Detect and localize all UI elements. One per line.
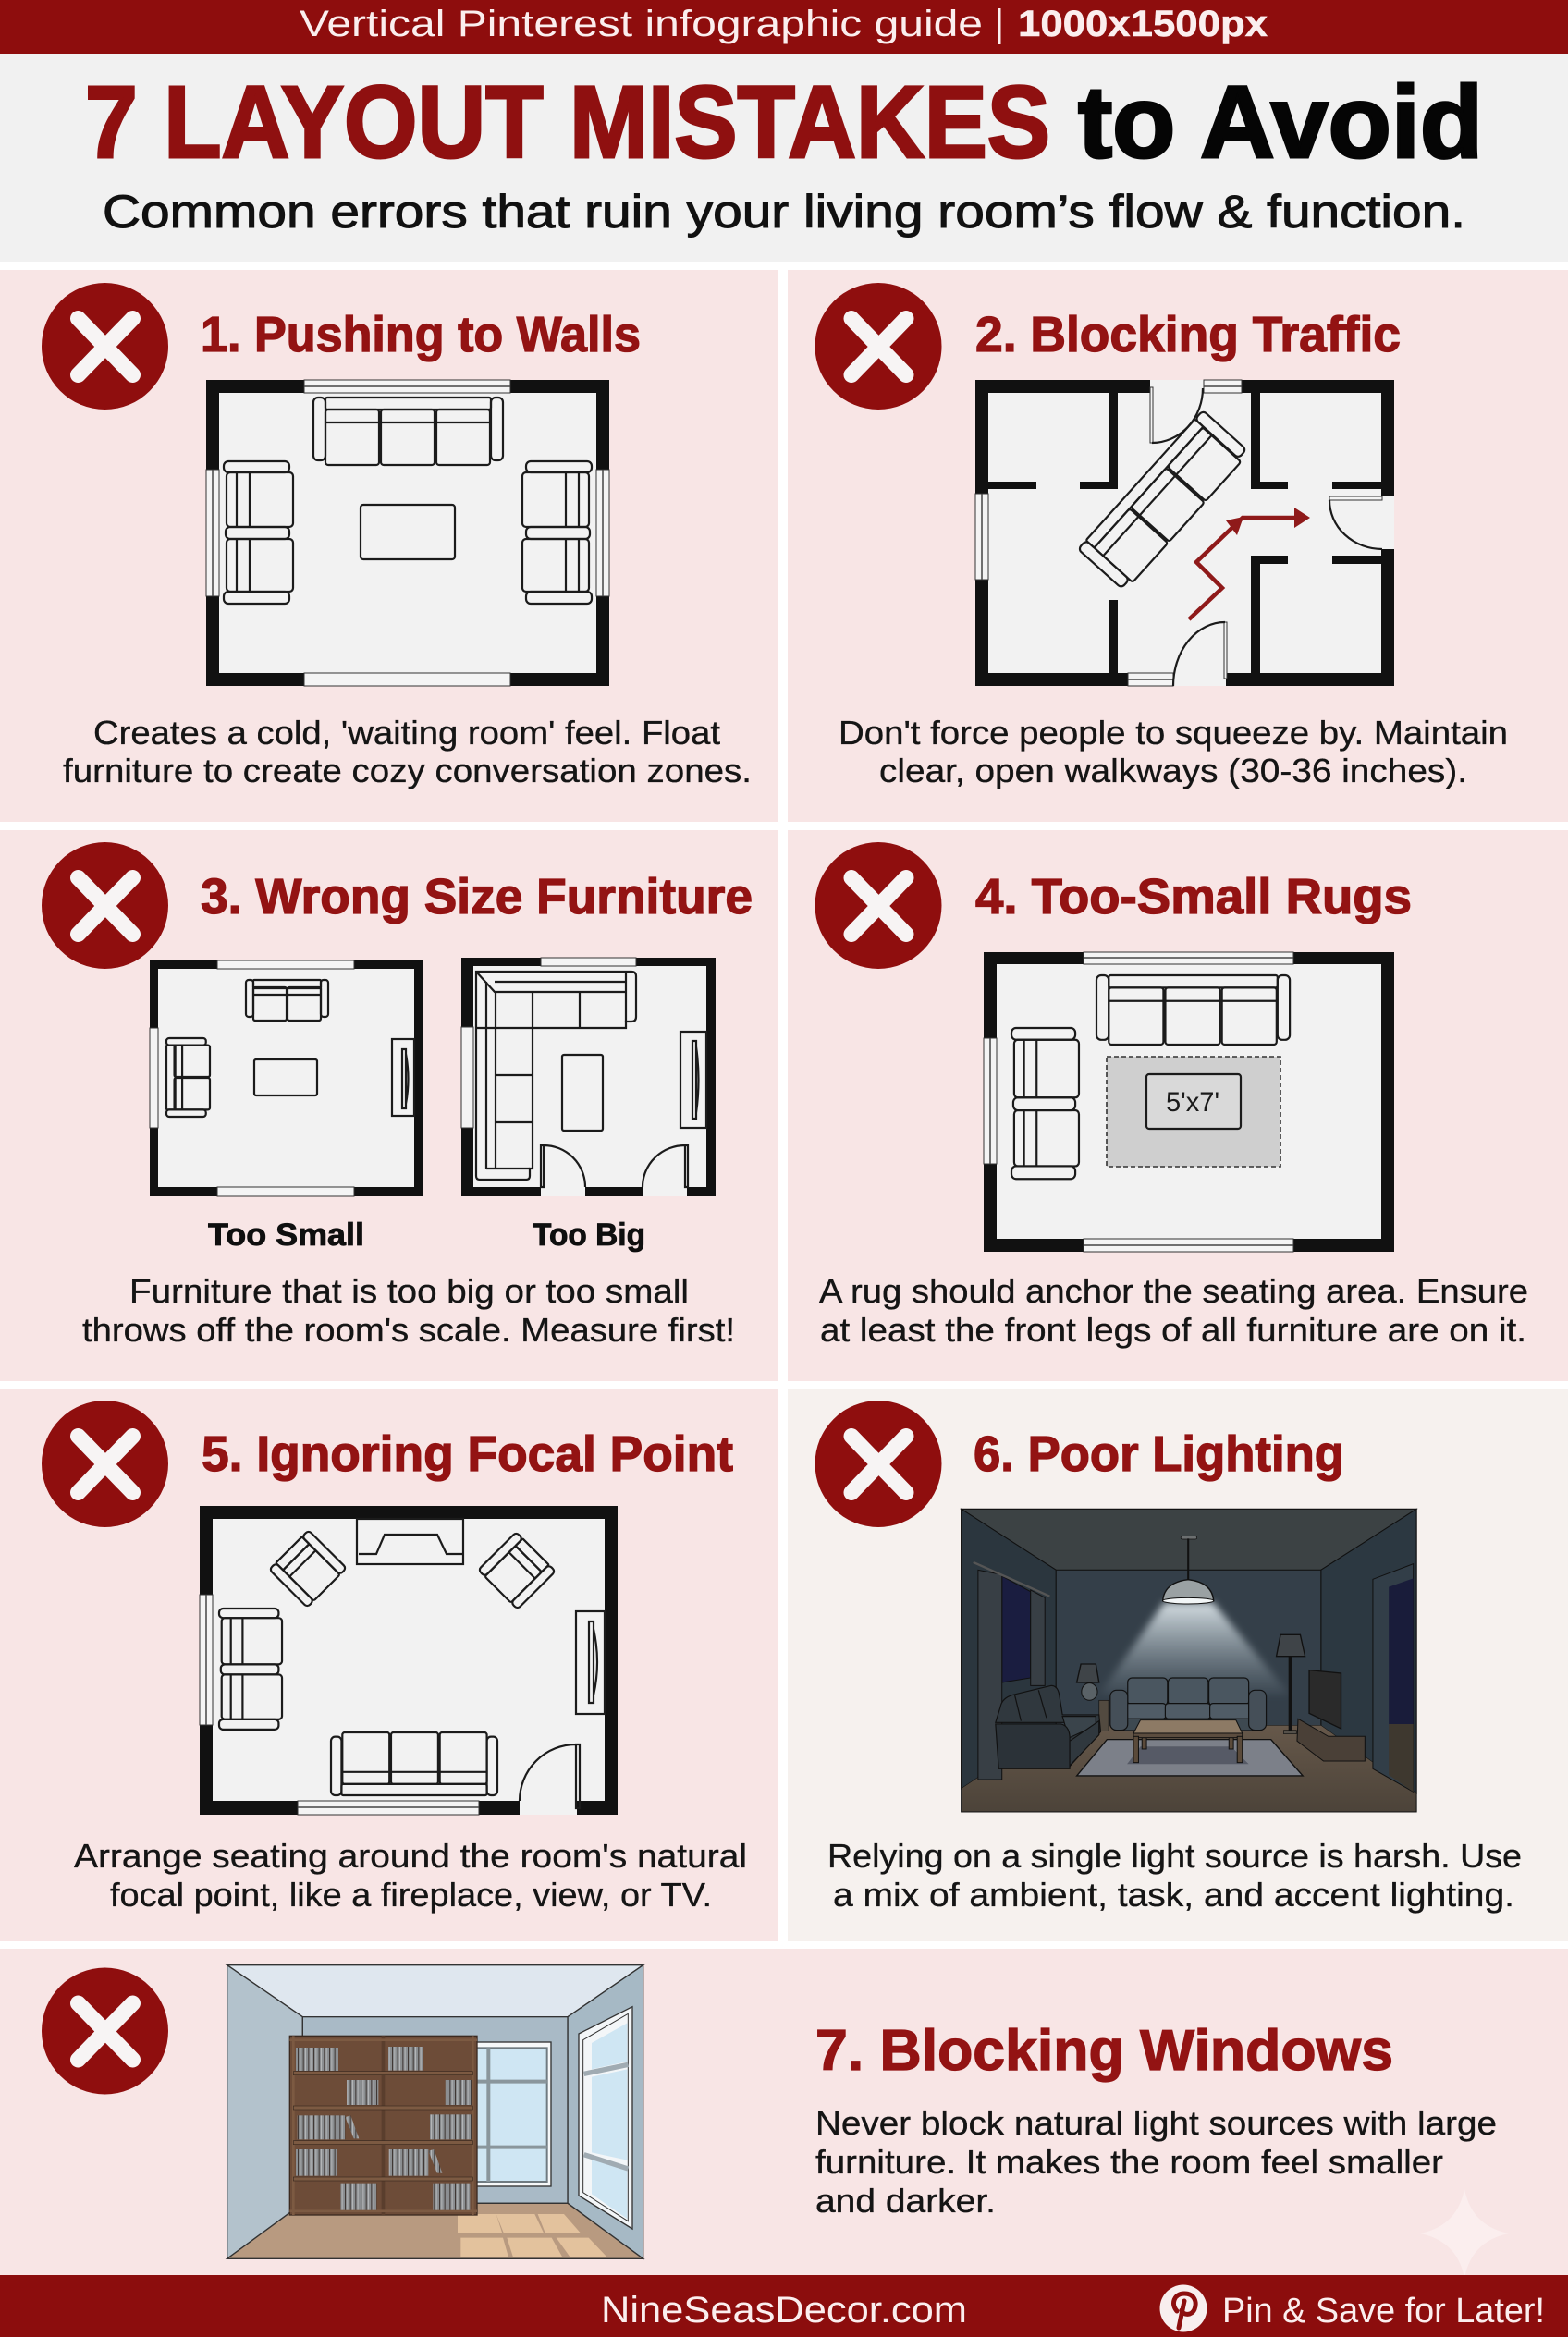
angled chairs — [269, 1530, 556, 1609]
icon: red x — [42, 842, 168, 969]
floor plan — [984, 952, 1394, 1252]
description: focal point, like a fireplace, view, or TV. — [110, 1876, 712, 1914]
heading: 4. Too-Small Rugs — [975, 869, 1412, 924]
description: furniture to create cozy conversation zones. — [63, 752, 752, 789]
header panel — [0, 54, 1568, 262]
description — [63, 714, 752, 789]
description: furniture. It makes the room feel smaller — [815, 2143, 1443, 2181]
title: to Avoid — [1078, 66, 1483, 179]
top banner: Vertical Pinterest infographic guide — [300, 4, 983, 44]
tv stand — [576, 1611, 605, 1714]
description: a mix of ambient, task, and accent lighting. — [833, 1876, 1514, 1914]
floor plan: too big — [461, 958, 716, 1196]
sunlight patches — [458, 2214, 607, 2257]
description: Never block natural light sources with large — [815, 2104, 1497, 2142]
heading: 5. Ignoring Focal Point — [202, 1426, 733, 1482]
heading: 1. Pushing to Walls — [201, 307, 641, 362]
description — [74, 1837, 747, 1914]
panel 1: pushing to walls — [0, 270, 778, 822]
fireplace — [357, 1519, 463, 1564]
pendant lamp — [1163, 1536, 1214, 1604]
tv — [1309, 1670, 1341, 1729]
arrow: traffic path — [1189, 508, 1310, 619]
heading: 7. Blocking Windows — [815, 2019, 1393, 2083]
coffee table — [1133, 1720, 1243, 1763]
icon: pinterest — [1159, 2285, 1207, 2331]
description — [827, 1837, 1522, 1914]
top banner — [0, 0, 1568, 54]
panel 6: poor lighting — [788, 1389, 1568, 1941]
side window — [579, 2007, 632, 2229]
title: 7 LAYOUT MISTAKES — [85, 66, 1050, 179]
bookcase — [289, 2036, 477, 2215]
floor lamp — [1277, 1634, 1305, 1734]
icon: red x — [42, 1401, 168, 1527]
description: Don't force people to squeeze by. Maintain — [839, 714, 1508, 752]
window and curtains — [974, 1562, 1049, 1780]
back window — [469, 2042, 551, 2186]
heading: 6. Poor Lighting — [974, 1426, 1344, 1482]
table lamp — [1077, 1664, 1109, 1731]
description: at least the front legs of all furniture are on it. — [820, 1311, 1526, 1349]
books — [296, 2047, 472, 2210]
panel 3: wrong size furniture — [0, 830, 778, 1381]
description: Relying on a single light source is harsh. Use — [827, 1837, 1522, 1875]
coffee table with size label — [1146, 1074, 1241, 1129]
description — [839, 714, 1508, 789]
side sofa — [996, 1685, 1100, 1768]
panel 7: blocking windows — [0, 1949, 1568, 2278]
icon: red x — [42, 283, 168, 410]
illustration: bookcase blocking window — [227, 1965, 643, 2258]
heading: 2. Blocking Traffic — [975, 307, 1401, 362]
sofa blocking the path — [1078, 410, 1250, 591]
subtitle: Common errors that ruin your living room’s flow & function. — [103, 186, 1465, 238]
call to action: Pin & Save for Later! — [1222, 2292, 1545, 2331]
description: clear, open walkways (30-36 inches). — [879, 752, 1467, 789]
floor plan — [206, 380, 609, 686]
icon: red x — [815, 1401, 941, 1527]
tv stand — [1297, 1719, 1365, 1761]
description: throws off the room's scale. Measure first! — [82, 1311, 735, 1349]
coffee table with size label: 5'x7' — [1166, 1087, 1219, 1118]
icon: sparkle — [1420, 2189, 1509, 2278]
door on right wall — [1373, 1564, 1414, 1792]
description: Creates a cold, 'waiting room' feel. Float — [93, 714, 720, 752]
panel 2: blocking traffic — [788, 270, 1568, 822]
website: NineSeasDecor.com — [601, 2290, 967, 2331]
label: too small: Too Small — [208, 1217, 364, 1253]
heading: 3. Wrong Size Furniture — [201, 869, 753, 924]
icon: red x — [815, 283, 941, 410]
label: too big: Too Big — [533, 1217, 645, 1253]
description — [819, 1272, 1528, 1349]
description: A rug should anchor the seating area. Ensure — [819, 1272, 1528, 1310]
description: and darker. — [815, 2182, 996, 2220]
description — [815, 2104, 1497, 2220]
icon: red x — [42, 1967, 168, 2095]
panel 5: ignoring focal point — [0, 1389, 778, 1941]
icon: red x — [815, 842, 941, 969]
top banner: 1000x1500px — [1018, 4, 1268, 44]
light cone — [1099, 1602, 1290, 1695]
description — [82, 1272, 735, 1349]
rug — [1077, 1740, 1303, 1776]
illustration: dim living room — [962, 1509, 1416, 1812]
floor plan: too small — [150, 960, 423, 1196]
floor plan — [975, 380, 1394, 686]
description: Furniture that is too big or too small — [129, 1272, 689, 1310]
door — [520, 1744, 580, 1808]
description: Arrange seating around the room's natural — [74, 1837, 747, 1875]
back sofa — [1110, 1678, 1267, 1731]
floor plan — [200, 1506, 618, 1815]
footer bar — [0, 2275, 1568, 2337]
rug — [1107, 1057, 1280, 1167]
panel 4: too-small rugs — [788, 830, 1568, 1381]
